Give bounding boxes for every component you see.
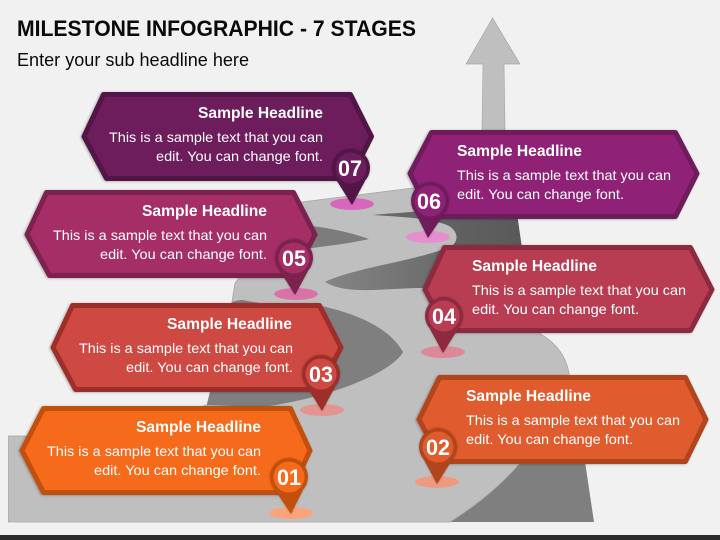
road bend shadow near stage 4	[325, 245, 522, 292]
stage 03 text	[79, 316, 293, 375]
stage 01 panel	[22, 408, 310, 492]
stage 05	[27, 192, 318, 300]
stage 06 text: edit. You can change font.	[457, 186, 624, 202]
title: MILESTONE INFOGRAPHIC - 7 STAGES	[17, 16, 416, 41]
stage 07 panel	[84, 94, 372, 178]
stage 06	[406, 132, 697, 243]
stage 03 panel	[53, 306, 341, 390]
stage 07	[84, 94, 374, 210]
stage 05 text	[53, 203, 267, 262]
stage 02 panel	[419, 378, 706, 462]
stage 05 panel	[27, 192, 315, 276]
stage 06 pin	[411, 182, 449, 238]
stage 04 text: This is a sample text that you can	[472, 282, 686, 298]
stage 05 text: This is a sample text that you can	[53, 227, 267, 243]
stage 06 text: This is a sample text that you can	[457, 167, 671, 183]
stage 05 text: edit. You can change font.	[100, 246, 267, 262]
stage 07 text: Sample Headline	[198, 105, 323, 122]
stage 04 panel	[425, 248, 712, 330]
stage 03 ellipse marker	[300, 404, 344, 416]
stage 01 text: edit. You can change font.	[94, 462, 261, 478]
stage 02 text: edit. You can change font.	[466, 431, 633, 447]
stage 02 pin: 02	[426, 435, 450, 460]
road bend shadow near stage 3	[207, 300, 403, 407]
stage 03 pin	[302, 355, 340, 411]
stage 04 pin: 04	[432, 304, 457, 329]
stage 01 text: Sample Headline	[136, 419, 261, 436]
footer bar	[0, 535, 720, 540]
stage 06 panel	[410, 132, 697, 216]
stage 02 text: Sample Headline	[466, 388, 591, 405]
stage 04 pin	[425, 297, 463, 353]
stage 06 ellipse marker	[406, 231, 450, 243]
stage 01 ellipse marker	[269, 507, 313, 519]
stage 05 ellipse marker	[274, 288, 318, 300]
stage 02 text: This is a sample text that you can	[466, 412, 680, 428]
stage 04 text: edit. You can change font.	[472, 301, 639, 317]
stage 05 pin: 05	[282, 246, 306, 271]
light road surface	[8, 188, 570, 522]
sub headline: Enter your sub headline here	[17, 50, 249, 70]
stage 01	[22, 408, 313, 519]
stage 04 text: Sample Headline	[472, 258, 597, 275]
stage 02 text	[466, 388, 680, 447]
stage 01 text: This is a sample text that you can	[47, 443, 261, 459]
arrow at end of road	[466, 18, 520, 130]
stage 03 text: edit. You can change font.	[126, 359, 293, 375]
stage 01 pin: 01	[277, 465, 301, 490]
road bend shadow under stage 5	[290, 226, 369, 250]
stage 06 text: Sample Headline	[457, 143, 582, 160]
stage 03 text: Sample Headline	[167, 316, 292, 333]
stage 04	[421, 248, 712, 358]
stage 01 pin	[270, 458, 308, 514]
dark lower right road side	[450, 455, 594, 522]
stage 02	[415, 378, 706, 488]
stage 05 text: Sample Headline	[142, 203, 267, 220]
stage 07 pin	[332, 149, 370, 205]
stage 03 text: This is a sample text that you can	[79, 340, 293, 356]
stage 02 ellipse marker	[415, 476, 459, 488]
winding road with arrow	[8, 18, 594, 522]
stage 04 ellipse marker	[421, 346, 465, 358]
stage 07 ellipse marker	[330, 198, 374, 210]
stage 07 text	[109, 105, 323, 164]
stage 03	[53, 306, 344, 416]
stage 06 text	[457, 143, 671, 202]
stage 01 text	[47, 419, 261, 478]
stage 07 text: edit. You can change font.	[156, 148, 323, 164]
stage 07 text: This is a sample text that you can	[109, 129, 323, 145]
stage 03 pin: 03	[309, 362, 333, 387]
stage 07 pin: 07	[338, 156, 362, 181]
stage 06 pin: 06	[417, 189, 441, 214]
stage 02 pin	[419, 428, 457, 484]
road bend shadow near stage 6	[373, 130, 522, 248]
stage 04 text	[472, 258, 686, 317]
stage 05 pin	[275, 239, 313, 295]
